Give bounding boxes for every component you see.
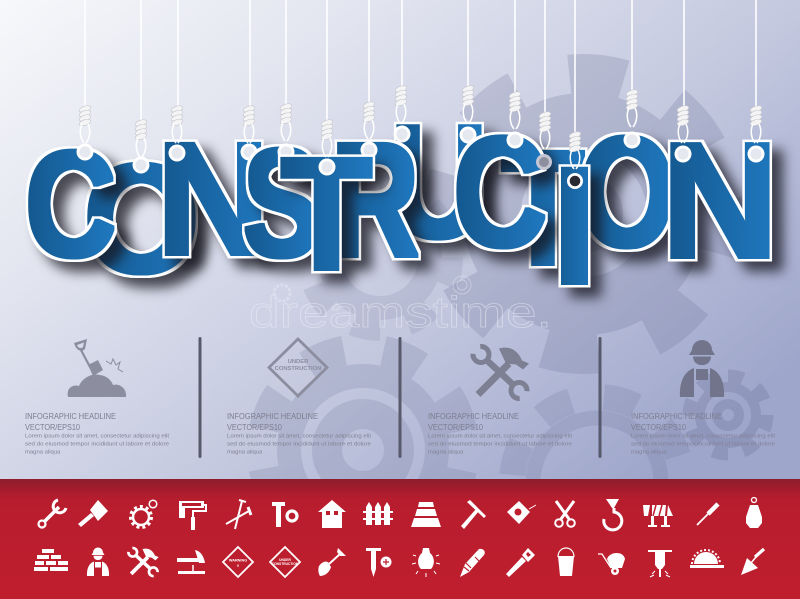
icon: wheelbarrow	[598, 553, 625, 575]
gear: lower centre left	[243, 330, 483, 570]
icon: warning sign	[223, 547, 253, 577]
text block	[428, 411, 573, 456]
gear: large upper right	[431, 61, 737, 367]
icon: plumb bob	[746, 498, 762, 528]
gear: lower centre right	[505, 390, 689, 574]
panel: dig	[25, 339, 170, 456]
text block: INFOGRAPHIC HEADLINE	[25, 411, 116, 421]
letter U: U	[390, 93, 488, 272]
icon: under construction sign: UNDER	[288, 359, 309, 365]
icon: light bulb	[412, 548, 440, 577]
icon: hammer and nail	[177, 550, 205, 574]
icon: house	[318, 500, 346, 528]
text block: INFOGRAPHIC HEADLINE	[631, 411, 722, 421]
watermark	[249, 276, 552, 337]
text block: INFOGRAPHIC HEADLINE	[428, 411, 519, 421]
panel: tools	[428, 346, 573, 456]
icon: hammer	[461, 500, 486, 529]
hole	[624, 132, 640, 148]
icon: crossed wrench and hammer	[473, 346, 529, 399]
hole	[76, 144, 94, 160]
icon: road barrier	[643, 505, 673, 527]
letter S: S	[243, 117, 320, 289]
icon: jackhammer	[648, 550, 672, 577]
letter T: T	[281, 125, 372, 303]
letter T second: T	[501, 116, 585, 299]
letter O: O	[83, 133, 200, 306]
icon row two	[34, 547, 764, 577]
icon: spade	[318, 548, 346, 576]
background gears	[243, 61, 767, 574]
text block: sed do eiusmod tempor incididunt ut labore et dolore	[25, 442, 170, 448]
gear: behind letters centre	[308, 186, 452, 330]
hole	[318, 158, 336, 176]
icon: under construction sign: CONSTRUCTION	[272, 562, 299, 566]
text block	[25, 411, 170, 456]
hole	[278, 144, 294, 160]
text block: INFOGRAPHIC HEADLINE	[227, 411, 318, 421]
text block: VECTOR/EPS10	[25, 422, 80, 432]
divider	[198, 337, 202, 458]
icon: road	[411, 502, 441, 527]
icon: circular saw	[690, 550, 724, 568]
icon: nails	[226, 500, 251, 529]
text block: magna aliqua	[25, 450, 61, 456]
icon: trowel	[741, 549, 764, 575]
hole	[360, 142, 378, 158]
text block: sed do eiusmod tempor incididunt ut labore et dolore	[631, 442, 776, 448]
icon: under construction sign: UNDER	[279, 558, 291, 562]
holes	[168, 144, 258, 162]
divider	[398, 337, 402, 458]
holes	[394, 126, 476, 144]
icon: brick wall	[34, 549, 68, 571]
holes	[506, 132, 552, 170]
icon row one	[38, 498, 762, 530]
icon: under construction sign	[270, 547, 300, 577]
icon: tape measure	[507, 501, 536, 524]
text block: VECTOR/EPS10	[227, 422, 282, 432]
text block: magna aliqua	[227, 450, 263, 456]
text block: Lorem ipsum dolor sit amet, consectetur adipiscing elit	[227, 434, 371, 440]
hole	[567, 173, 583, 189]
text block	[227, 411, 372, 456]
panel: under construction	[227, 339, 372, 456]
text block: magna aliqua	[631, 450, 667, 456]
icon: screwdriver	[697, 504, 718, 525]
letter C: C	[25, 120, 116, 289]
icon: crane hook	[604, 499, 622, 530]
icon: shovel in pile	[68, 339, 126, 397]
icon: gears	[130, 500, 157, 528]
icon: scissors	[555, 501, 575, 527]
panel: red icon band	[0, 479, 800, 599]
icon: wrench	[38, 500, 66, 528]
icon: worker	[87, 548, 109, 576]
hanging ropes and knots	[78, 0, 763, 169]
icon: under construction sign	[269, 339, 327, 396]
panel: worker	[631, 340, 776, 456]
icon: warning sign: !!	[237, 564, 239, 568]
text block: sed do eiusmod tempor incididunt ut labore et dolore	[227, 442, 372, 448]
text block: sed do eiusmod tempor incididunt ut labore et dolore	[428, 442, 573, 448]
letter R: R	[331, 109, 419, 291]
letter C second: C	[453, 104, 547, 280]
icon: hand saw	[506, 548, 535, 577]
icon: under construction sign: CONSTRUCTION	[275, 366, 321, 372]
divider	[598, 337, 602, 458]
text block	[631, 411, 776, 456]
gear: small right	[689, 376, 767, 454]
text block: VECTOR/EPS10	[428, 422, 483, 432]
watermark: dreamstime.	[249, 288, 552, 337]
holes	[674, 146, 764, 162]
icon: warning sign: WARNING	[229, 558, 247, 562]
text block: Lorem ipsum dolor sit amet, consectetur adipiscing elit	[631, 434, 775, 440]
icon: axe	[78, 500, 108, 527]
letter O second: O	[579, 104, 675, 279]
text block: Lorem ipsum dolor sit amet, consectetur adipiscing elit	[428, 434, 572, 440]
icon: bucket	[558, 548, 574, 576]
letter N second: N	[662, 108, 778, 292]
icon: utility knife	[460, 549, 485, 577]
icon: construction worker	[680, 340, 724, 397]
title: hanging letters CONSTRUCTION	[25, 93, 778, 319]
icon: paint roller	[179, 501, 207, 530]
icon: screw and plus	[366, 548, 392, 577]
icon: wrench and hammer	[128, 548, 159, 576]
icon: fence	[363, 502, 393, 525]
text block: magna aliqua	[428, 450, 464, 456]
letter N: N	[156, 110, 270, 288]
hole	[132, 156, 150, 174]
text block: VECTOR/EPS10	[631, 422, 686, 432]
letter I: I	[552, 132, 597, 319]
icon: bolt and nut	[272, 502, 297, 527]
text block: Lorem ipsum dolor sit amet, consectetur adipiscing elit	[25, 434, 169, 440]
